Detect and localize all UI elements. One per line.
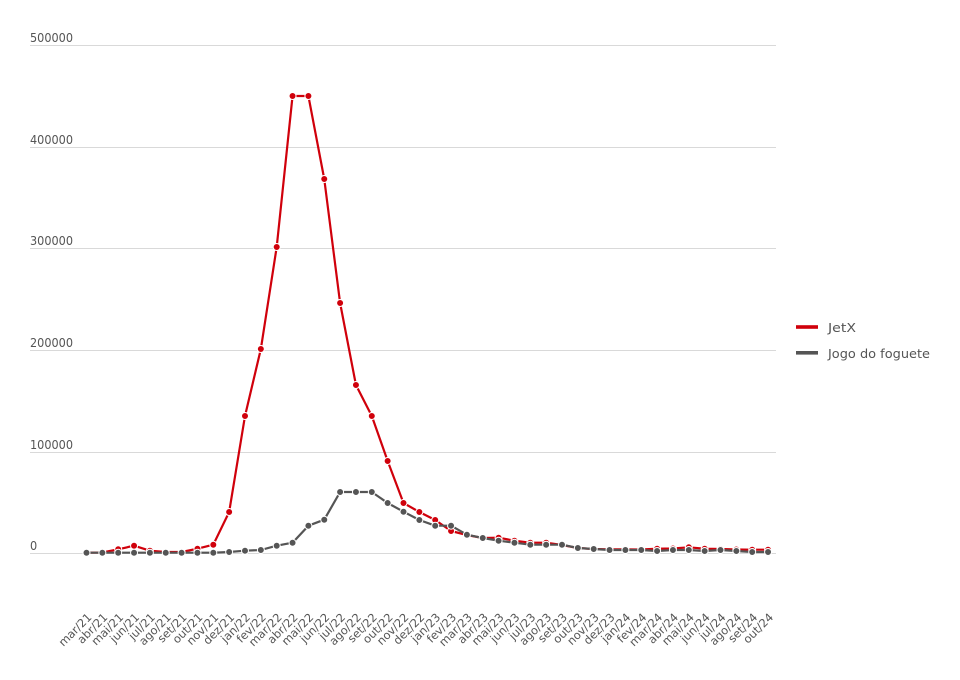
x axis labels: jul/21 <box>125 610 158 643</box>
x axis labels: nov/23 <box>564 610 602 648</box>
x axis labels: dez/21 <box>200 610 237 647</box>
x axis labels: mai/23 <box>469 610 507 648</box>
x axis labels: ago/22 <box>326 610 364 648</box>
x axis labels: nov/21 <box>184 610 221 648</box>
legend item: JetX: JetX <box>827 320 856 335</box>
x axis labels: out/24 <box>740 610 776 646</box>
legend <box>796 320 930 361</box>
y axis labels: 100000 <box>30 438 73 452</box>
y axis labels: 500000 <box>30 31 73 45</box>
x axis labels <box>56 610 776 649</box>
series: JetX <box>83 92 772 556</box>
x axis labels: mar/24 <box>626 610 665 649</box>
x axis labels: mai/24 <box>659 610 697 648</box>
x axis labels: jan/22 <box>217 610 253 646</box>
y axis labels: 0 <box>30 539 37 553</box>
x axis labels: ago/23 <box>516 610 554 648</box>
legend item: Jogo do foguete: Jogo do foguete <box>827 346 930 361</box>
x axis labels: jan/24 <box>598 610 633 646</box>
x axis labels: mai/22 <box>279 610 316 648</box>
x axis labels: jul/24 <box>695 610 729 643</box>
x axis labels: ago/24 <box>707 610 744 648</box>
x axis labels: out/23 <box>550 610 586 646</box>
x axis labels: abr/23 <box>455 610 491 646</box>
x axis labels: fev/22 <box>233 610 269 646</box>
x axis labels: abr/24 <box>645 610 681 646</box>
x axis labels: jan/23 <box>407 610 443 646</box>
x axis labels: mar/22 <box>246 610 285 649</box>
x axis labels: jul/22 <box>315 610 348 643</box>
x axis labels: set/22 <box>345 610 380 645</box>
x axis labels: dez/23 <box>580 610 618 647</box>
x axis labels: jun/21 <box>106 610 142 646</box>
y axis labels <box>30 31 73 553</box>
x axis labels: set/24 <box>725 610 760 645</box>
x axis labels: mar/23 <box>436 610 475 649</box>
series: Jogo do foguete <box>83 488 772 556</box>
x axis labels: abr/22 <box>264 610 301 646</box>
x axis labels: nov/22 <box>374 610 412 648</box>
x axis labels: fev/24 <box>614 610 649 646</box>
y axis labels: 200000 <box>30 336 73 350</box>
x axis labels: fev/23 <box>424 610 459 646</box>
x axis labels: jun/22 <box>296 610 332 646</box>
x axis labels: jun/23 <box>487 610 523 646</box>
y axis labels: 400000 <box>30 133 73 147</box>
x axis labels: set/21 <box>154 610 190 645</box>
x axis labels: mar/21 <box>56 610 95 649</box>
x axis labels: dez/22 <box>390 610 427 647</box>
x axis labels: abr/21 <box>74 610 110 646</box>
x axis labels: jul/23 <box>505 610 538 643</box>
x axis labels: out/21 <box>169 610 206 646</box>
x axis labels: set/23 <box>535 610 570 645</box>
x axis labels: mai/21 <box>88 610 126 648</box>
y axis labels: 300000 <box>30 234 73 248</box>
x axis labels: out/22 <box>360 610 396 646</box>
x axis labels: jun/24 <box>677 610 713 646</box>
x axis labels: ago/21 <box>136 610 174 648</box>
